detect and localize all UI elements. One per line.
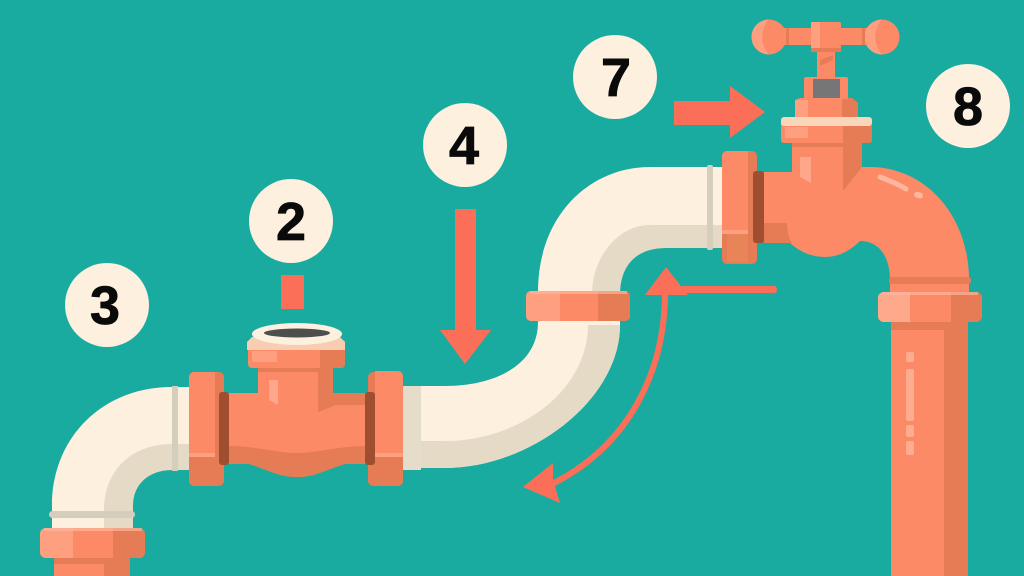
number badge 3: 3 — [90, 276, 120, 336]
right flange of T fitting — [365, 371, 403, 486]
number badge 4 — [423, 103, 507, 187]
faucet flange — [722, 151, 764, 264]
number badge 8 — [926, 64, 1010, 148]
middle orange collar — [526, 291, 630, 321]
lower left orange collar — [40, 528, 145, 576]
valve grey square — [813, 79, 840, 98]
arrow: curved double-headed with leader line — [523, 267, 777, 503]
arrow: right-pointing near 7 — [674, 86, 765, 138]
number badge 3 — [65, 263, 149, 347]
left cream elbow pipe — [49, 386, 195, 532]
left flange of T fitting — [189, 372, 229, 486]
number badge 2: 2 — [276, 192, 306, 252]
faucet body — [764, 143, 862, 257]
number badge 4: 4 — [449, 116, 479, 176]
faucet T-handle — [752, 20, 900, 54]
right vertical pipe with collar — [878, 292, 982, 576]
T-junction fitting — [226, 323, 368, 477]
arrow: down-pointing near 4 — [440, 209, 491, 364]
number badge 8: 8 — [953, 77, 983, 137]
right orange elbow pipe — [835, 167, 971, 292]
faucet valve stack — [781, 50, 872, 143]
number badge 7: 7 — [601, 48, 631, 108]
number badge 7 — [573, 35, 657, 119]
central S-curve cream pipe — [400, 165, 725, 470]
marker: short bar under 2 — [281, 275, 304, 309]
number badge 2 — [249, 179, 333, 263]
fitting opening — [264, 328, 330, 338]
